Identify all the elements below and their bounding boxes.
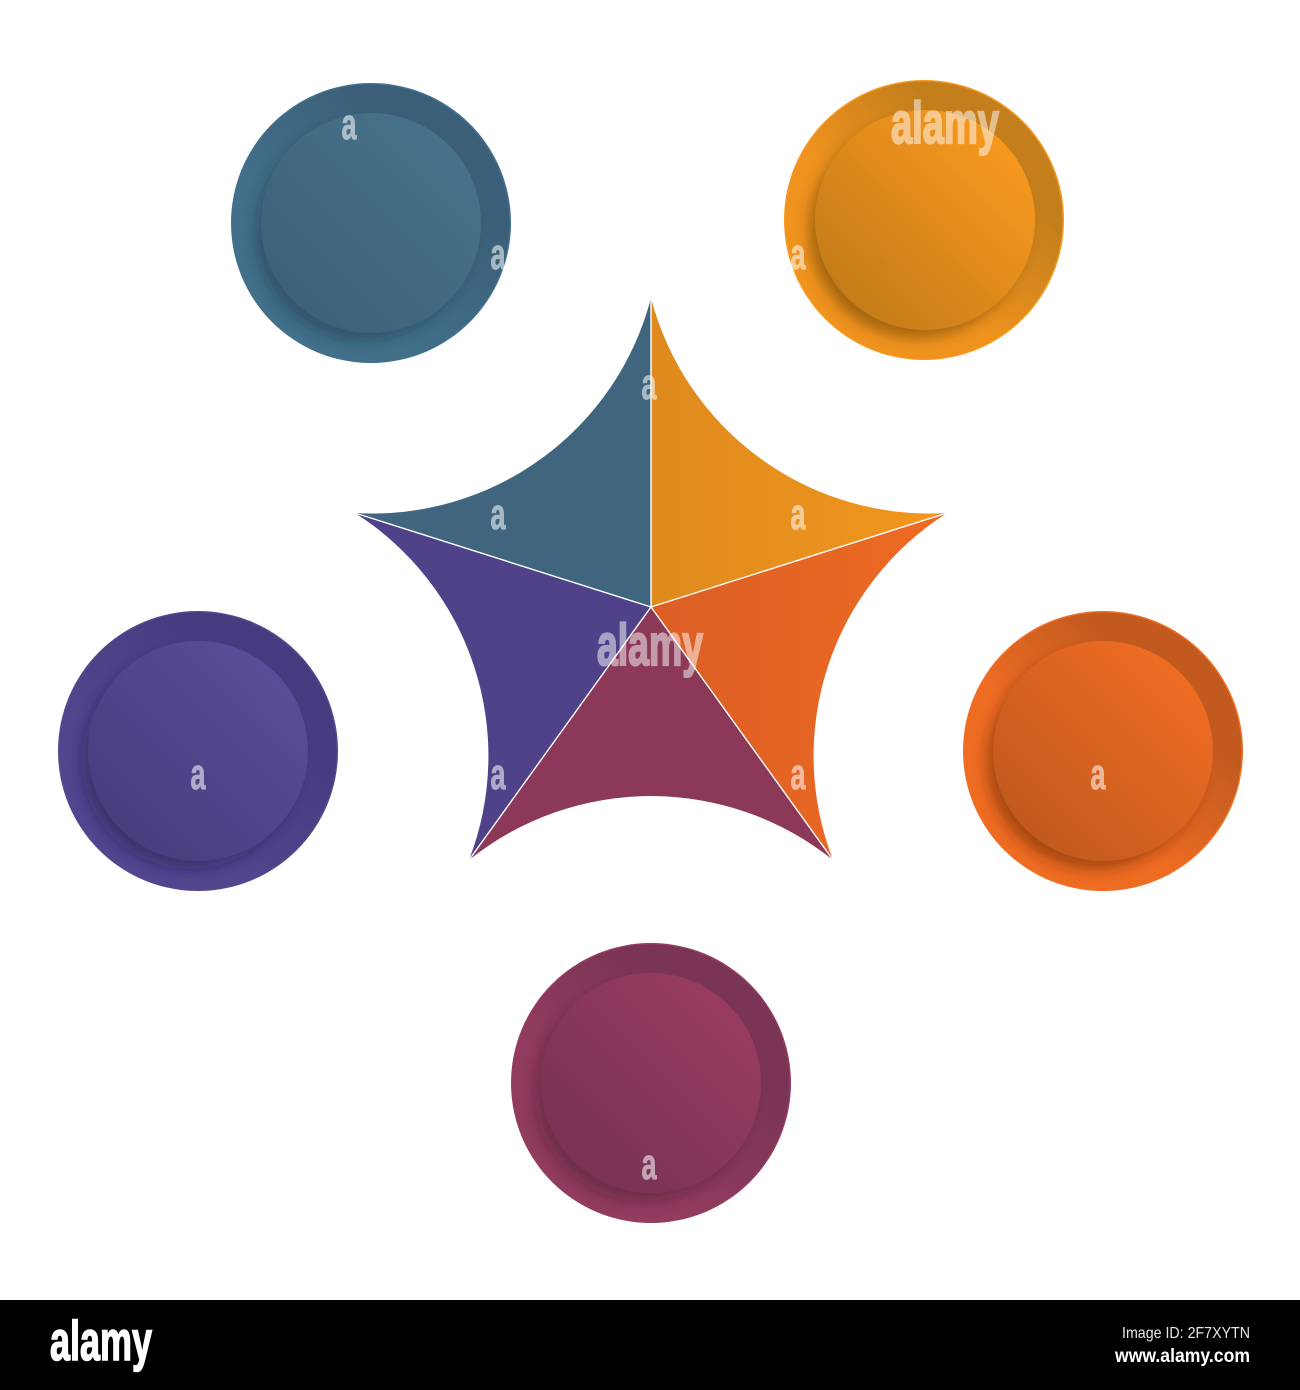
watermark letters: a [342, 100, 357, 149]
segment: orange [651, 298, 947, 607]
watermark letters: a [190, 750, 206, 799]
footer bar [0, 1300, 1300, 1390]
watermark letters: a [790, 750, 806, 799]
watermark letters: a [490, 230, 506, 279]
segment: purple [355, 513, 651, 860]
watermark letters [190, 100, 1106, 1189]
segment: blue [355, 298, 651, 607]
watermark letters: a [642, 360, 657, 409]
watermark: center: alamy [597, 613, 703, 678]
circle: magenta [511, 943, 791, 1223]
watermark letters: a [790, 490, 806, 539]
website: www.alamy.com [1114, 1346, 1250, 1367]
segment: magenta [469, 607, 833, 860]
watermark letters: a [490, 750, 506, 799]
circle: purple [58, 611, 338, 891]
watermark: top right: alamy [891, 91, 999, 156]
watermark letters: a [490, 490, 506, 539]
watermark letters: a [642, 1140, 657, 1189]
star chart [355, 298, 947, 860]
circle: blue [231, 83, 511, 363]
watermark letters: a [790, 230, 806, 279]
circle: red-orange [963, 611, 1243, 891]
watermark letters: a [1090, 750, 1106, 799]
segment: red-orange [651, 513, 947, 860]
footer logo: alamy [50, 1309, 152, 1372]
image id: Image ID: 2F7XYTN [1122, 1325, 1250, 1342]
circle: orange [784, 80, 1064, 360]
